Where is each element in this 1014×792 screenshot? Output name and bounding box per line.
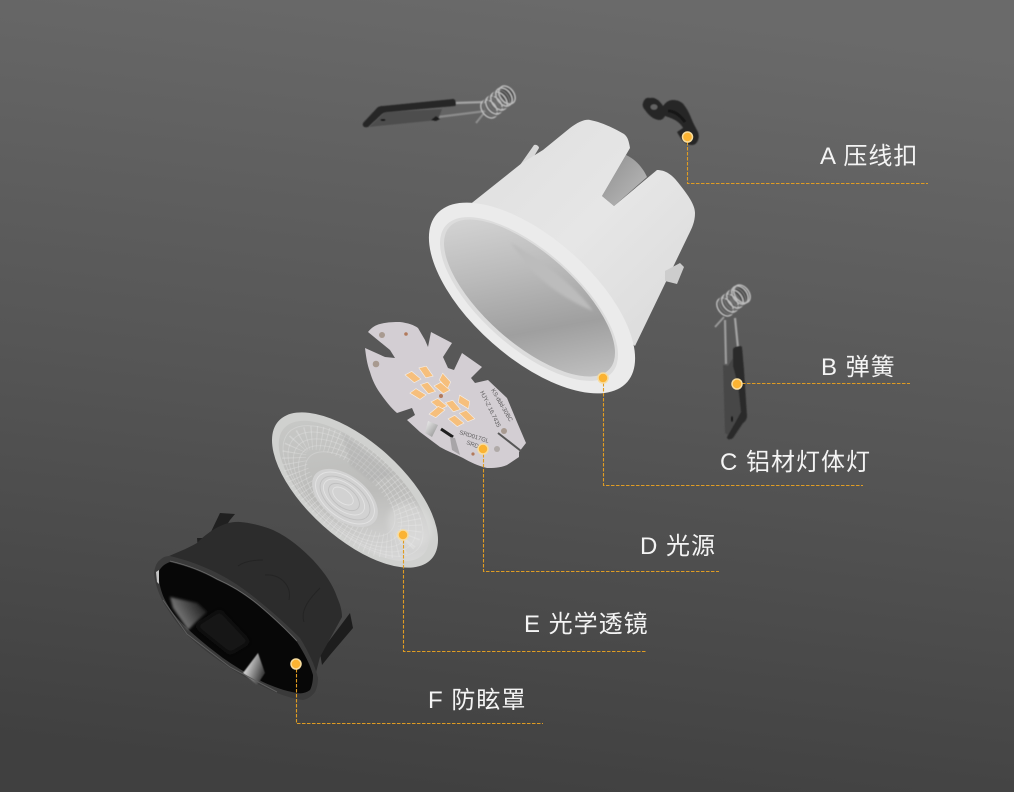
mirror marks bbox=[425, 421, 438, 437]
callout D bbox=[478, 444, 719, 572]
coil bbox=[497, 85, 517, 105]
bright lower right bbox=[390, 504, 428, 542]
rear tab right bbox=[665, 263, 684, 284]
cup inner bbox=[158, 562, 313, 693]
cup outer wall bbox=[165, 522, 342, 680]
illustration: aluminium lamp body bbox=[397, 120, 695, 427]
board slot bbox=[498, 433, 521, 451]
wall details bbox=[238, 560, 320, 622]
callout B: B 弹簧 bbox=[821, 354, 896, 381]
callout A bbox=[682, 132, 928, 184]
inner ring bbox=[414, 189, 644, 409]
icon: spring clip top left bbox=[363, 83, 519, 127]
illustration: LED light source board bbox=[365, 322, 526, 468]
clip plate bbox=[723, 358, 745, 435]
radial texture bbox=[282, 426, 420, 557]
callout B bbox=[732, 354, 910, 389]
inner highlights bbox=[170, 597, 207, 630]
callout F: F 防眩罩 bbox=[428, 687, 526, 714]
deep opening bbox=[510, 242, 593, 311]
clip arm bbox=[363, 99, 456, 127]
board print: HJY-Z 16.7435 bbox=[478, 390, 501, 429]
illustration: anti-glare cup bbox=[154, 513, 353, 700]
slot interior bbox=[602, 155, 647, 206]
icon: wire clamp A bbox=[643, 98, 699, 145]
flange bbox=[397, 169, 667, 427]
callout F bbox=[291, 659, 543, 724]
clip arm bbox=[727, 346, 747, 439]
callout D: D 光源 bbox=[640, 533, 716, 560]
board print bbox=[458, 388, 513, 453]
PCB outline bbox=[365, 322, 526, 468]
rear tab left bbox=[520, 145, 539, 165]
callout C bbox=[598, 373, 871, 486]
board print: KS-ddd-30BC bbox=[489, 388, 513, 424]
rim bbox=[154, 556, 318, 700]
callout A: A 压线扣 bbox=[820, 143, 918, 170]
board print: SRD017GL bbox=[458, 430, 490, 445]
callout E bbox=[398, 530, 649, 652]
clip plate bbox=[369, 109, 442, 127]
tab top bbox=[197, 513, 235, 552]
inner highlight rim line bbox=[170, 561, 297, 641]
illustration: optical lens bbox=[272, 412, 438, 568]
board print: SRD07 bbox=[465, 440, 486, 453]
LED chips bbox=[405, 366, 475, 427]
callout E: E 光学透镜 bbox=[524, 611, 649, 638]
coil bbox=[732, 284, 752, 304]
body shell bbox=[468, 120, 695, 346]
tab right bbox=[320, 613, 353, 665]
centre pattern bbox=[302, 457, 388, 539]
icon: spring B bbox=[713, 282, 754, 439]
darker upper wedge bbox=[344, 435, 392, 480]
callout C: C 铝材灯体灯 bbox=[720, 449, 871, 476]
reflector cone bbox=[420, 193, 639, 403]
